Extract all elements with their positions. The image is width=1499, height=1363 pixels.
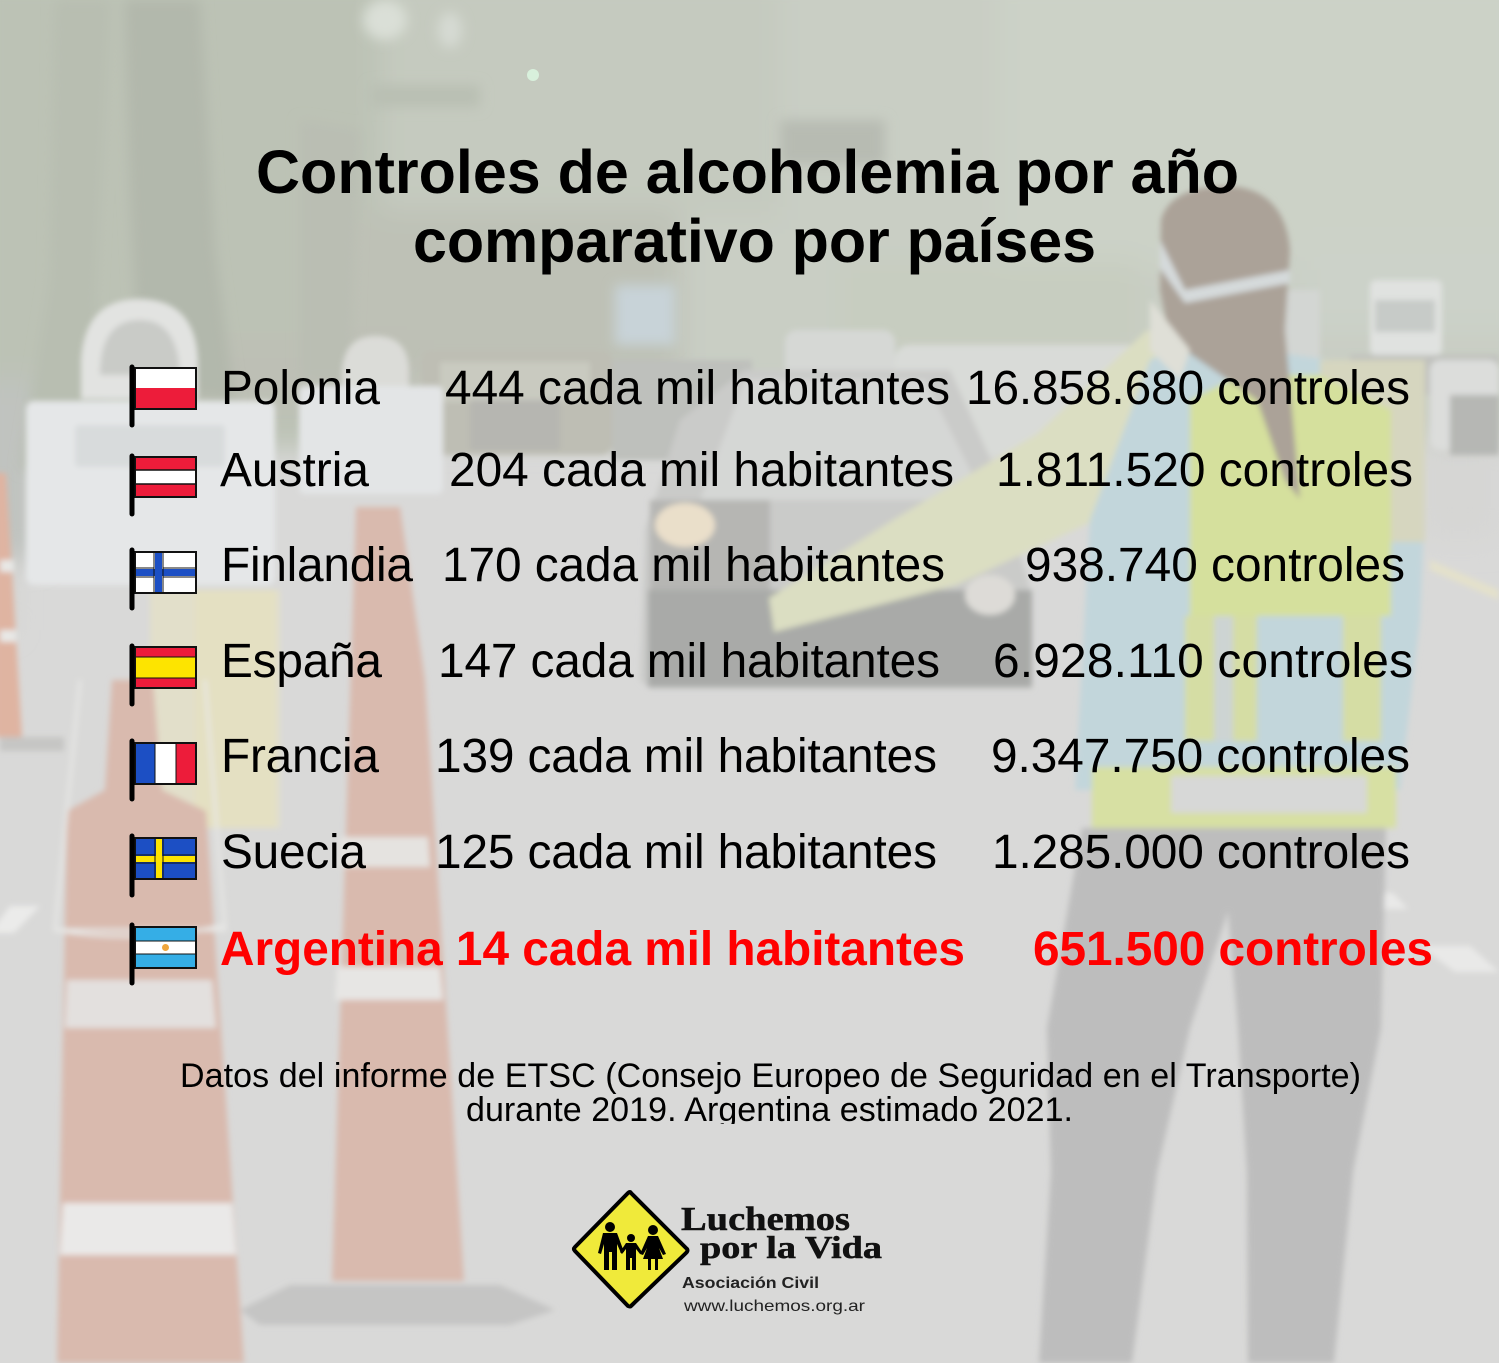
- row: Finlandia: 170 cada mil habitantes: [442, 539, 945, 592]
- source note: durante 2019. Argentina estimado 2021.: [466, 1091, 1073, 1129]
- row: Finlandia: 938.740 controles: [1025, 539, 1405, 592]
- small left cone: [0, 473, 22, 737]
- row: Polonia: 444 cada mil habitantes: [445, 362, 950, 415]
- road markings: [1420, 946, 1499, 972]
- officer legs: [1039, 828, 1386, 1363]
- logo: Luchemos por la Vida: por la Vida: [700, 1229, 882, 1265]
- cars in the background: [421, 351, 612, 455]
- middle traffic cone: [332, 507, 464, 1281]
- officer arm: [769, 330, 1190, 632]
- row: Argentina (highlighted): Argentina 14 cada mil habitantes: [220, 923, 965, 976]
- officer jacket: [1075, 340, 1425, 790]
- row: Polonia: 16.858.680 controles: [966, 362, 1410, 415]
- logo: Luchemos por la Vida: Luchemos: [681, 1201, 850, 1238]
- icon: yellow diamond road sign with family: [574, 1192, 688, 1306]
- row: Austria: Austria: [220, 444, 369, 497]
- traffic light: [527, 69, 539, 81]
- row: Finlandia: [132, 539, 1405, 608]
- title: Controles de alcoholemia por año: [256, 138, 1239, 206]
- icon: flag of Finland: [132, 550, 196, 608]
- icon: flag of France: [132, 741, 196, 799]
- cone guard wire: [55, 680, 225, 936]
- row: Suecia: 1.285.000 controles: [992, 826, 1410, 879]
- icon: flag of Sweden: [132, 836, 196, 895]
- row: Francia: Francia: [221, 730, 379, 783]
- row: Suecia: [132, 826, 1410, 895]
- row: Suecia: Suecia: [221, 826, 366, 879]
- row: Austria: [132, 444, 1413, 514]
- main car: [640, 370, 1032, 689]
- logo: Luchemos por la Vida: www.luchemos.org.ar: [683, 1298, 866, 1315]
- title: comparativo por países: [413, 207, 1096, 275]
- icon: flag of Argentina: [132, 925, 196, 983]
- row: Finlandia: Finlandia: [221, 539, 413, 592]
- row: Francia: [132, 730, 1410, 799]
- yellow post: [150, 590, 280, 828]
- icon: flag of Austria: [132, 456, 196, 514]
- source note: Datos del informe de ETSC (Consejo Europeo de Seguridad en el Transporte): [180, 1057, 1361, 1095]
- row: Polonia: Polonia: [221, 362, 380, 415]
- row: España: 6.928.110 controles: [993, 635, 1413, 688]
- source note: [182, 1062, 1359, 1124]
- logo: Luchemos por la Vida: Asociación Civil: [682, 1275, 819, 1292]
- row: Francia: 139 cada mil habitantes: [435, 730, 937, 783]
- row: España: [132, 635, 1413, 704]
- row: Austria: 204 cada mil habitantes: [449, 444, 954, 497]
- row: Suecia: 125 cada mil habitantes: [435, 826, 937, 879]
- tree canopy and far street: [0, 0, 1499, 630]
- row: Austria: 1.811.520 controles: [996, 444, 1413, 497]
- parking sign boards: [81, 299, 198, 399]
- tree trunks: [20, 0, 110, 470]
- title: [256, 138, 1239, 275]
- row: España: España: [221, 635, 382, 688]
- row: Argentina (highlighted): [132, 923, 1433, 983]
- row: España: 147 cada mil habitantes: [438, 635, 940, 688]
- row: Polonia: [132, 362, 1410, 425]
- officer head and hair: [1160, 186, 1300, 499]
- logo: Luchemos por la Vida: [574, 1192, 882, 1315]
- left traffic cone: [57, 680, 244, 1363]
- reflective vest: [1190, 375, 1391, 616]
- icon: flag of Poland: [132, 367, 196, 425]
- row: Argentina (highlighted): 651.500 controles: [1033, 923, 1433, 976]
- icon: flag of Spain: [132, 646, 196, 704]
- row: Francia: 9.347.750 controles: [991, 730, 1410, 783]
